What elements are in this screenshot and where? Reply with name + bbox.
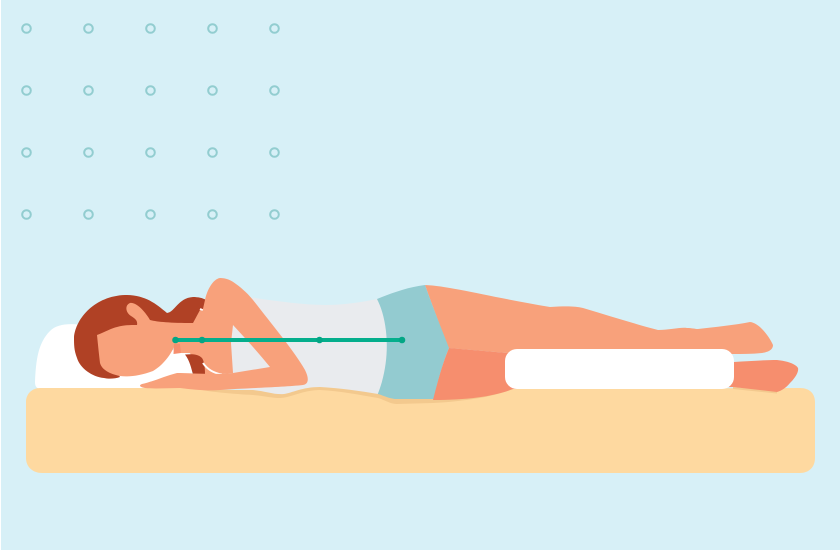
near leg (425, 285, 773, 362)
face and neck (97, 303, 233, 376)
shorts (377, 285, 449, 402)
mattress sunken shadow (195, 387, 513, 410)
hair (74, 295, 206, 379)
tank top lower strap (203, 363, 222, 374)
neck shadow (174, 344, 181, 354)
lower hair strand (185, 354, 205, 375)
dot grid pattern (22, 24, 279, 219)
tank top strap white (200, 309, 232, 320)
spine alignment line (172, 337, 405, 343)
head pillow (35, 324, 192, 389)
foot shadow on mattress (733, 387, 777, 394)
mattress (26, 388, 815, 473)
far foot and lower leg (433, 348, 798, 400)
arm and hand (140, 278, 308, 390)
knee pillow (505, 349, 734, 389)
torso tank top (230, 296, 387, 402)
